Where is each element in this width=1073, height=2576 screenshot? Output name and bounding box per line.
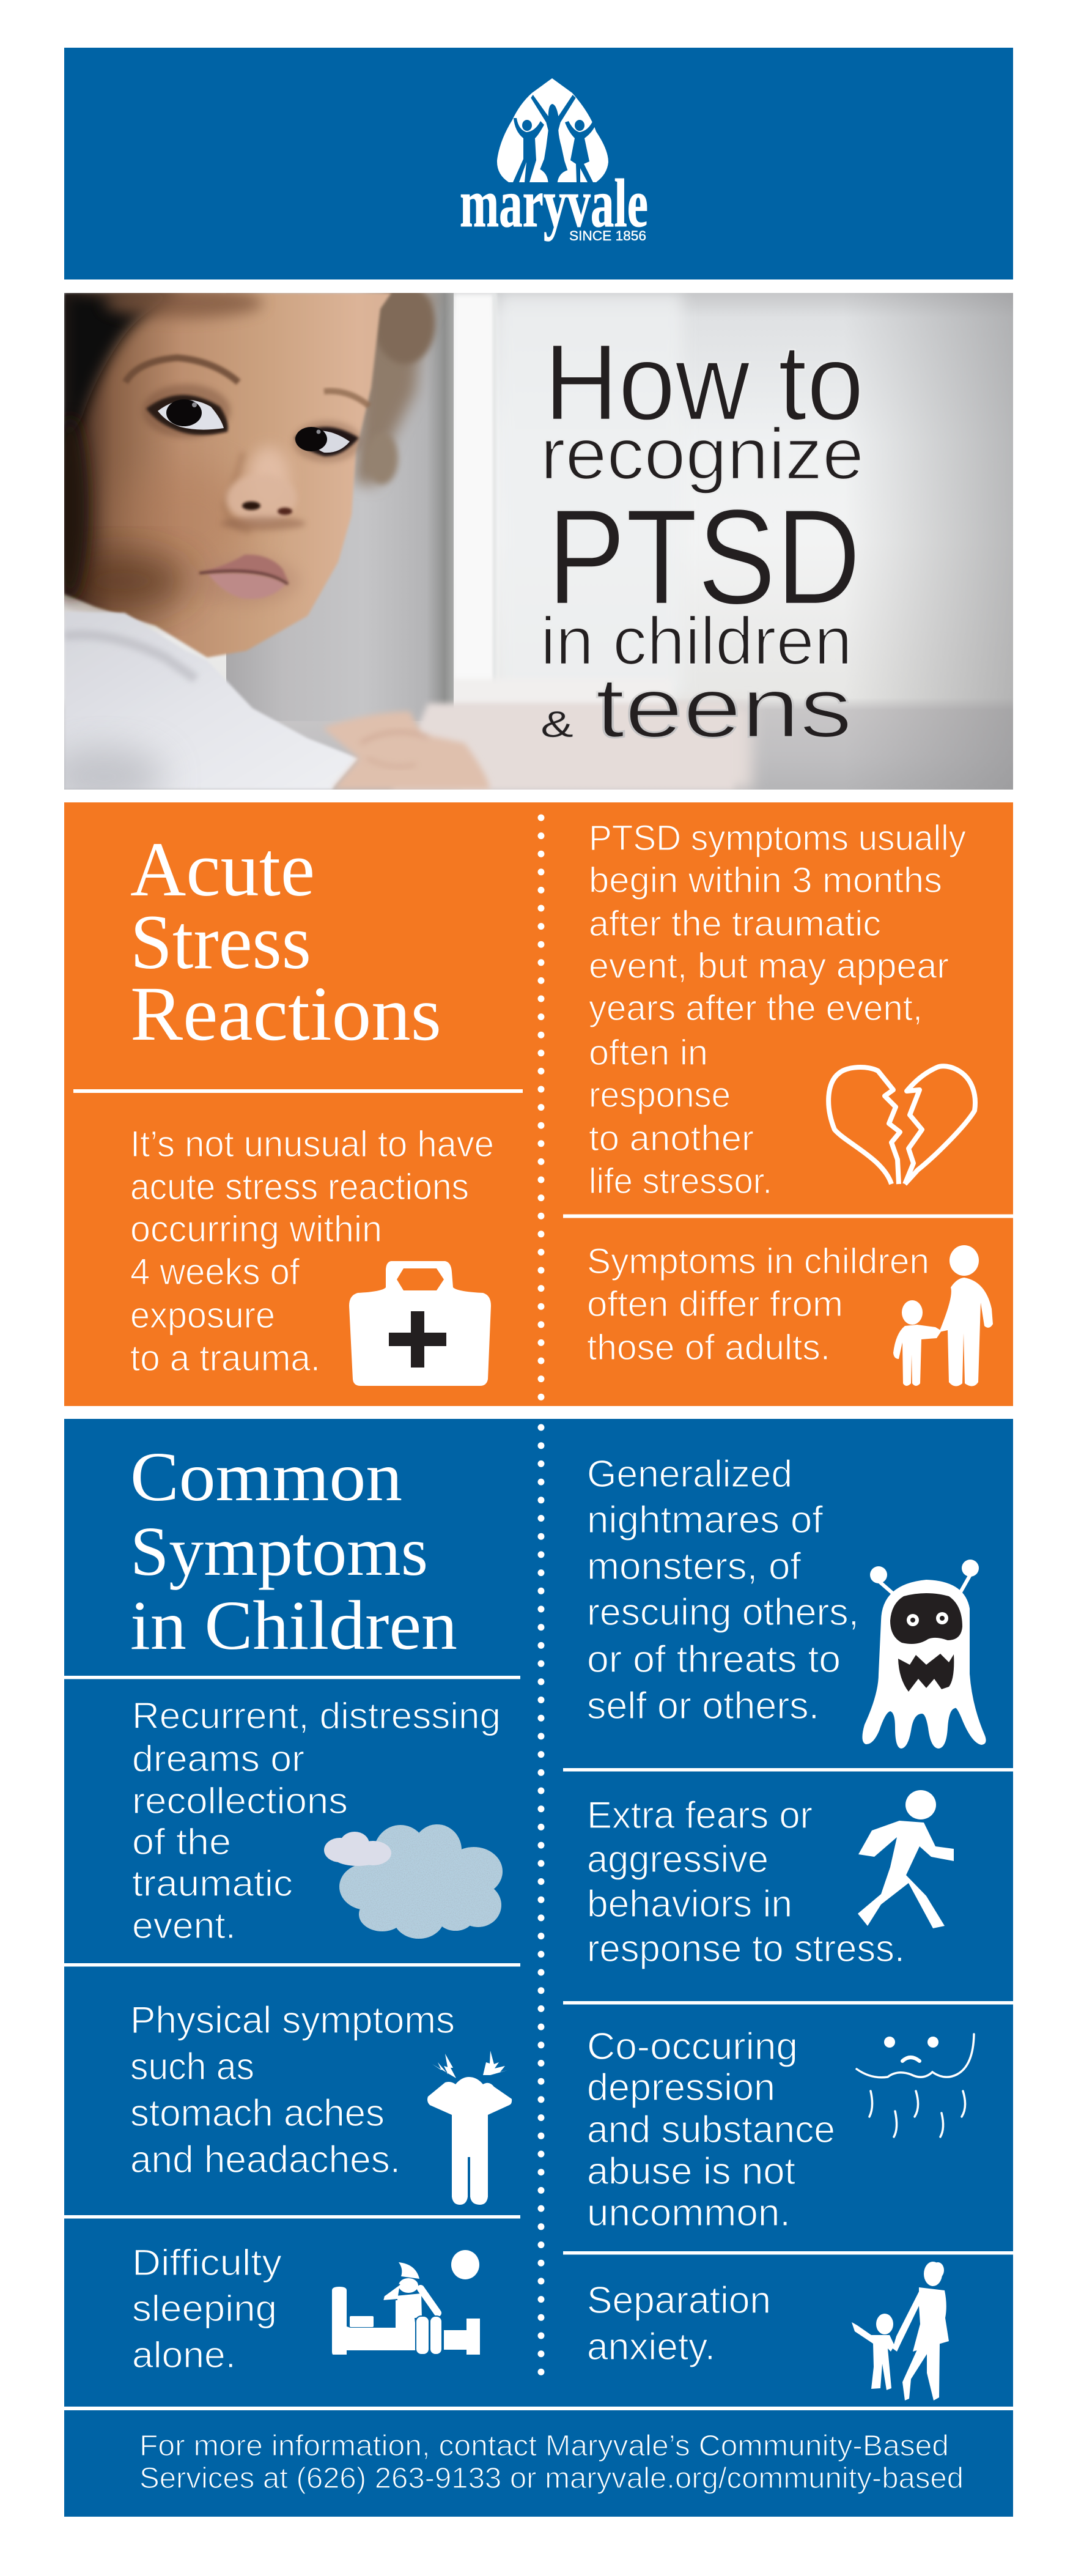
text: generalized nightmares: monsters, of [587, 1545, 802, 1588]
text: symptoms differ from adults: those of adults. [587, 1328, 830, 1368]
text: PTSD symptom onset: after the traumatic [589, 904, 881, 944]
text: extra fears: aggressive [587, 1838, 769, 1881]
text: recurrent dreams: recollections [132, 1780, 348, 1821]
icon: monster [862, 1560, 986, 1749]
text: extra fears: behaviors in [587, 1883, 792, 1925]
title: How to [544, 322, 864, 443]
text: recurrent dreams: of the [132, 1821, 231, 1862]
title [540, 322, 864, 755]
text: PTSD symptom onset: years after the event, [589, 988, 923, 1028]
text: PTSD symptom onset: response [589, 1075, 731, 1115]
title: & [540, 704, 573, 745]
text: acute reactions within 4 weeks: exposure [130, 1295, 275, 1336]
icon: child sitting on bed at night [332, 2250, 480, 2355]
panel: acute stress reactions [64, 802, 1013, 1406]
text: difficulty sleeping alone: sleeping [132, 2288, 277, 2329]
text: recurrent dreams: traumatic [132, 1863, 293, 1904]
text: recurrent dreams: Recurrent, distressing [132, 1695, 501, 1736]
text: physical symptoms: such as [130, 2046, 254, 2088]
text: co-occurring depression: and substance [587, 2109, 835, 2151]
heading: acute stress reactions [130, 827, 441, 1057]
logo wordmark: maryvale [460, 166, 648, 242]
text: physical symptoms [130, 1999, 455, 2181]
text: acute reactions within 4 weeks: It’s not unusual to have [130, 1123, 494, 1164]
heading: acute stress reactions: Stress [130, 900, 311, 985]
title: teens [595, 659, 852, 755]
text: co-occurring depression: abuse is not [587, 2150, 795, 2193]
text: symptoms differ from adults: often differ from [587, 1284, 843, 1324]
text: difficulty sleeping alone: alone. [132, 2334, 236, 2375]
text: generalized nightmares: rescuing others, [587, 1591, 859, 1634]
text: difficulty sleeping alone [132, 2242, 282, 2375]
text: acute reactions within 4 weeks [130, 1123, 494, 1379]
text: acute reactions within 4 weeks: to a trauma. [130, 1338, 320, 1379]
photo: child at window [43, 284, 1013, 807]
icon: adult and child [893, 1245, 993, 1386]
text: generalized nightmares: Generalized [587, 1453, 792, 1495]
text: co-occurring depression [587, 2026, 835, 2234]
icon: Maryvale logo mark [497, 78, 608, 182]
text: generalized nightmares: self or others. [587, 1685, 819, 1727]
icon: person with headache [427, 2051, 512, 2205]
title: in children [540, 604, 852, 679]
icon: sad raining cloud [857, 2034, 974, 2137]
logo tagline: SINCE 1856 [569, 228, 646, 243]
text: PTSD symptom onset: often in [589, 1033, 708, 1073]
text: recurrent dreams [132, 1695, 501, 1946]
icon: broken heart [828, 1066, 975, 1184]
title: recognize [540, 413, 864, 495]
text: generalized nightmares [587, 1453, 859, 1727]
text: extra fears: response to stress. [587, 1928, 905, 1970]
text: symptoms differ from adults [587, 1242, 929, 1368]
footer contact text [139, 2430, 964, 2495]
footer contact text: For more information, contact Maryvale’s Community-Based [139, 2430, 949, 2462]
heading: common symptoms in children: Symptoms [130, 1512, 428, 1590]
text: separation anxiety: Separation [587, 2279, 771, 2322]
text: separation anxiety [587, 2279, 771, 2368]
text: recurrent dreams: dreams or [132, 1738, 304, 1779]
title: PTSD [547, 481, 861, 633]
text: symptoms differ from adults: Symptoms in children [587, 1242, 929, 1281]
text: physical symptoms: stomach aches [130, 2092, 385, 2134]
heading: acute stress reactions: Reactions [130, 971, 441, 1057]
text: generalized nightmares: nightmares of [587, 1499, 824, 1541]
text: extra fears: Extra fears or [587, 1794, 813, 1837]
photo panel with title [43, 284, 1013, 807]
text: physical symptoms: Physical symptoms [130, 1999, 455, 2041]
icon: mother and child silhouette [852, 2262, 949, 2400]
header banner with logo [64, 48, 1013, 279]
heading: common symptoms in children: in Children [130, 1586, 457, 1664]
text: acute reactions within 4 weeks: occurring within [130, 1208, 382, 1249]
text: PTSD symptom onset: event, but may appear [589, 946, 949, 986]
text: acute reactions within 4 weeks: 4 weeks of [130, 1251, 300, 1292]
text: extra fears [587, 1794, 905, 1970]
text: generalized nightmares: or of threats to [587, 1638, 841, 1681]
text: recurrent dreams: event. [132, 1905, 236, 1946]
text: co-occurring depression: Co-occuring [587, 2026, 798, 2068]
text: PTSD symptom onset [589, 818, 966, 1201]
footer contact text: Services at (626) 263-9133 or maryvale.org/community-based [139, 2462, 964, 2495]
text: acute reactions within 4 weeks: acute stress reactions [130, 1166, 469, 1207]
panel: common symptoms in children [64, 1419, 1013, 2517]
text: PTSD symptom onset: begin within 3 months [589, 861, 942, 900]
text: separation anxiety: anxiety. [587, 2326, 715, 2368]
text: co-occurring depression: depression [587, 2067, 775, 2109]
icon: first aid kit [349, 1261, 491, 1386]
text: co-occurring depression: uncommon. [587, 2192, 791, 2234]
text: PTSD symptom onset: to another [589, 1119, 754, 1158]
text: difficulty sleeping alone: Difficulty [132, 2242, 282, 2283]
heading: common symptoms in children [130, 1438, 457, 1664]
icon: clouds [324, 1824, 503, 1939]
heading: common symptoms in children: Common [130, 1438, 402, 1516]
text: PTSD symptom onset: PTSD symptoms usually [589, 818, 966, 858]
text: PTSD symptom onset: life stressor. [589, 1161, 772, 1201]
heading: acute stress reactions: Acute [130, 827, 315, 912]
icon: walking figure [858, 1790, 954, 1928]
text: physical symptoms: and headaches. [130, 2139, 400, 2181]
